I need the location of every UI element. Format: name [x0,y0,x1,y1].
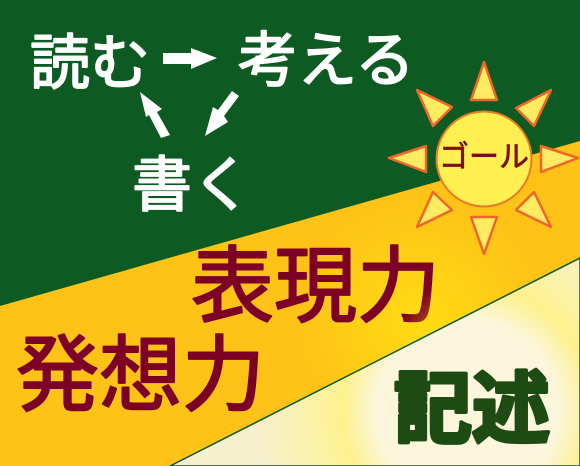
heading: imagination: 発想力 [16,329,265,422]
arrow: think to write [205,91,239,136]
background: yellow band [0,141,580,466]
heading: read: 読む [30,30,150,97]
sun rays [389,62,578,254]
arrow: read to think [163,48,217,69]
heading: descriptive writing: 記述 [394,365,550,453]
heading: write: 書く [132,152,252,219]
heading: expressiveness: 表現力 [191,240,440,333]
background: cream panel [170,258,580,466]
heading: think: 考える [238,27,415,94]
arrow: write to read [140,92,170,138]
label: goal: ゴール [439,141,529,174]
icon: sun goal [389,62,578,254]
sun disc [436,112,532,206]
